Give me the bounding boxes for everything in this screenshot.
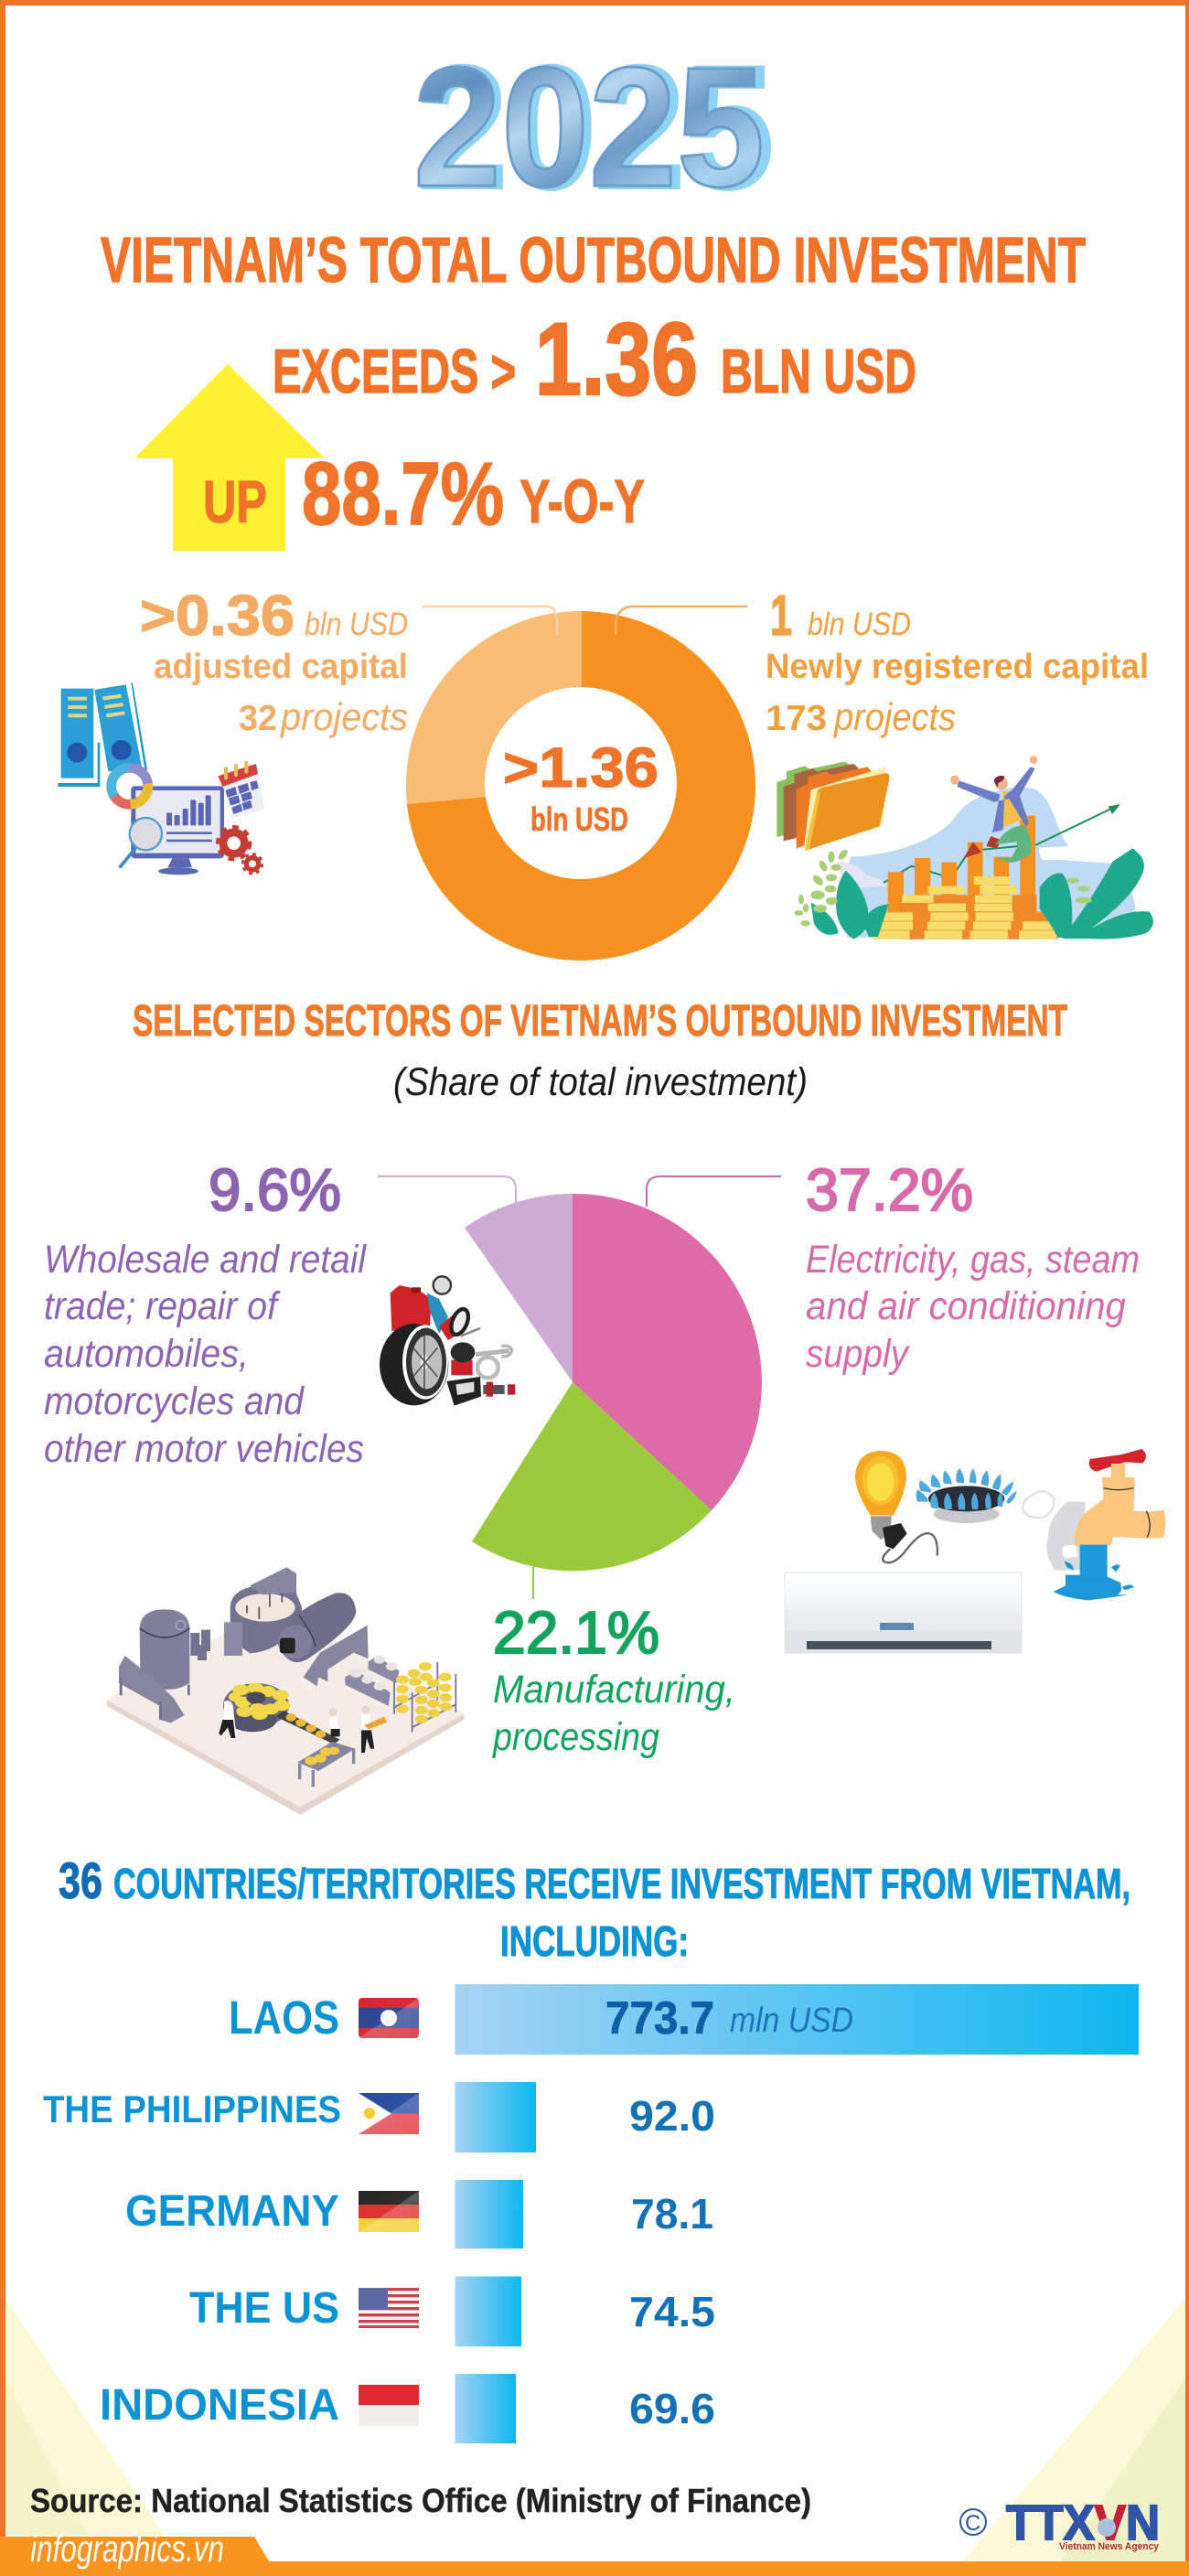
newly registered capital label: 173 — [766, 699, 827, 738]
bar row: Laos — [229, 1984, 1139, 2055]
headline figure: 1.36 — [535, 302, 698, 416]
subheading: (Share of total investment) — [393, 1060, 808, 1104]
label: electricity: supply — [806, 1332, 910, 1376]
footer bar — [0, 2537, 1189, 2576]
arrow: up — [134, 364, 325, 551]
adjusted capital label: 32 — [239, 699, 277, 738]
label: manufacturing — [491, 1599, 735, 1759]
bar row: Laos: 773.7 — [605, 1992, 714, 2044]
bar row: The Philippines: 92.0 — [629, 2092, 715, 2140]
icon: person on coin chart — [794, 756, 1153, 939]
label: wholesale and retail: automobiles, — [44, 1332, 249, 1376]
icon: folders — [777, 762, 889, 851]
section heading: countries: INCLUDING: — [500, 1917, 689, 1965]
growth figure: Y-O-Y — [520, 467, 645, 536]
logo: TTXVN: Vietnam News Agency — [1059, 2541, 1160, 2552]
donut centre total: bln USD — [530, 800, 628, 838]
icon: motor parts — [380, 1276, 515, 1406]
label: manufacturing: 22.1% — [493, 1599, 659, 1666]
bar row: Germany: 78.1 — [631, 2190, 713, 2238]
bar row: The Philippines: THE PHILIPPINES — [43, 2088, 341, 2131]
bar row: Indonesia: INDONESIA — [100, 2381, 339, 2430]
label: wholesale and retail — [44, 1156, 367, 1471]
icon: bulb gas and tap — [855, 1449, 1165, 1600]
donut centre total: >1.36 — [503, 736, 659, 799]
donut chart: capital split — [406, 606, 755, 961]
newly registered capital label — [766, 585, 1149, 738]
newly registered capital label: bln USD — [808, 606, 911, 642]
adjusted capital label: bln USD — [305, 606, 408, 642]
icon: binders and analytics monitor — [58, 683, 264, 875]
label: wholesale and retail: 9.6% — [209, 1156, 341, 1223]
year 2025: 2025 — [418, 31, 773, 223]
pie chart: sectors — [378, 1176, 781, 1599]
icon: factory — [107, 1567, 464, 1815]
growth figure: UP — [203, 468, 267, 535]
background corner triangles — [5, 2299, 1185, 2561]
label: electricity: Electricity, gas, steam — [806, 1238, 1140, 1282]
adjusted capital label: >0.36 — [140, 585, 295, 648]
newly registered capital label: Newly registered capital — [766, 648, 1149, 686]
growth figure — [203, 444, 645, 543]
adjusted capital label: adjusted capital — [154, 648, 408, 686]
bar row: Indonesia: 69.6 — [629, 2385, 715, 2432]
label: wholesale and retail: motorcycles and — [44, 1379, 305, 1423]
label: electricity — [806, 1156, 1140, 1376]
bar row: The US: 74.5 — [629, 2288, 715, 2335]
adjusted capital label: projects — [279, 695, 408, 738]
footer site name: infographics.vn — [30, 2528, 224, 2570]
headline figure: BLN USD — [721, 337, 916, 406]
bar row: Indonesia — [100, 2374, 715, 2443]
bar row: Germany: GERMANY — [125, 2187, 339, 2236]
adjusted capital label — [140, 585, 408, 738]
label: wholesale and retail: trade; repair of — [44, 1284, 281, 1328]
section heading: countries — [59, 1852, 1130, 1965]
growth figure: 88.7% — [302, 444, 504, 543]
bar row: The Philippines — [43, 2082, 715, 2152]
bar row: The US: THE US — [189, 2284, 339, 2333]
icon: air conditioner — [785, 1572, 1022, 1653]
bar row: Germany — [125, 2180, 713, 2249]
label: wholesale and retail: other motor vehicles — [44, 1427, 364, 1471]
donut centre total — [503, 736, 659, 838]
headline figure: EXCEEDS > — [273, 337, 516, 406]
source: Source: National Statistics Office (Ministry of Finance) — [30, 2482, 811, 2519]
label: manufacturing: processing — [491, 1715, 659, 1759]
label: electricity: and air conditioning — [806, 1284, 1126, 1328]
label: wholesale and retail: Wholesale and retail — [44, 1238, 367, 1282]
label: electricity: 37.2% — [806, 1156, 973, 1223]
newly registered capital label: 1 — [770, 585, 792, 648]
bar row: The US — [189, 2276, 715, 2346]
bar row: Laos: LAOS — [229, 1991, 339, 2044]
newly registered capital label: projects — [832, 695, 956, 738]
logo: TTXVN: TTXVN — [1006, 2496, 1160, 2550]
year 2025: 2025 — [413, 33, 765, 222]
bar row: Laos: mln USD — [730, 2002, 853, 2040]
label: manufacturing: Manufacturing, — [493, 1668, 735, 1712]
section heading: countries: 36 — [59, 1852, 102, 1909]
headline figure — [273, 302, 916, 416]
logo: TTXVN: C — [965, 2511, 980, 2536]
